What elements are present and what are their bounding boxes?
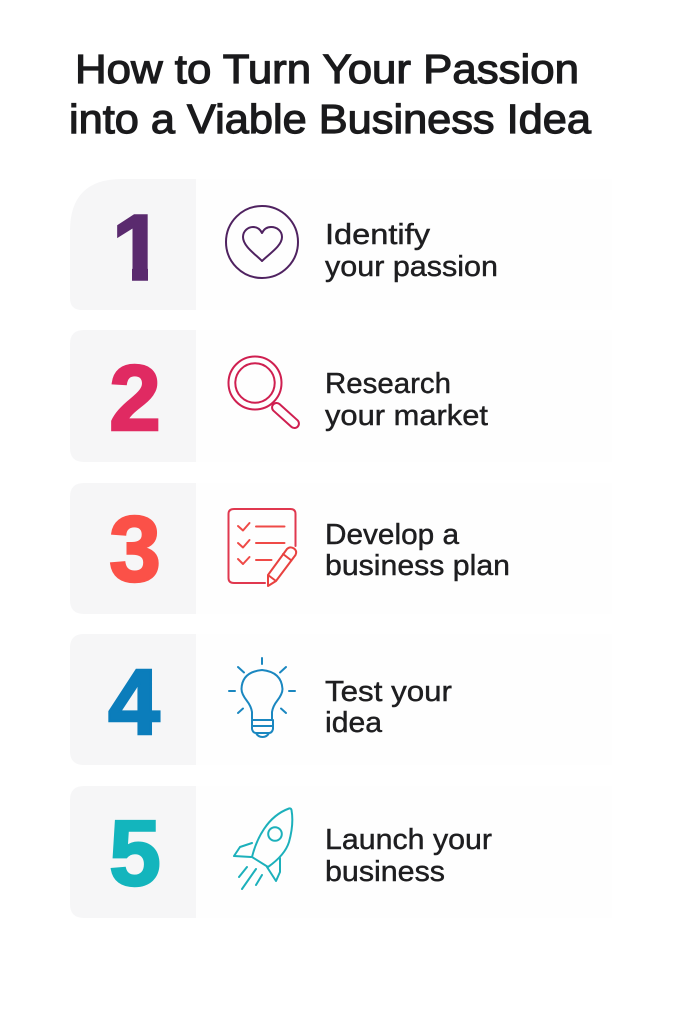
title: into a Viable Business Idea [69, 96, 591, 142]
number 1: 1 [112, 196, 164, 300]
label 3: Develop a [325, 519, 460, 551]
label 1: your passion [325, 251, 498, 283]
number 5: 5 [109, 801, 161, 905]
label 2: Research [325, 368, 451, 400]
title [69, 46, 591, 142]
label 3 [325, 519, 510, 582]
label 2: your market [325, 400, 488, 432]
label 3: business plan [325, 550, 510, 582]
number panel 3 [70, 483, 196, 614]
step 3: develop a business plan [70, 483, 612, 614]
icon: checklist and pencil [228, 509, 296, 586]
label 5 [325, 824, 492, 888]
number panel 4 [70, 634, 196, 765]
step 4: test your idea [70, 634, 612, 765]
number 4: 4 [108, 650, 160, 754]
label 1 [325, 219, 498, 283]
label 4 [325, 676, 452, 739]
label 1: Identify [325, 219, 431, 251]
label 2 [325, 368, 488, 432]
number panel 2 [70, 330, 196, 462]
icon: heart in circle [226, 206, 298, 278]
icon: rocket [234, 808, 292, 889]
label 5: business [325, 856, 445, 888]
label 5: Launch your [325, 824, 492, 856]
step 1: identify your passion [70, 179, 496, 310]
step 2: research your market [70, 330, 612, 462]
title: How to Turn Your Passion [75, 46, 579, 92]
icon: light bulb [229, 658, 295, 737]
label 4: idea [325, 707, 383, 739]
step 5: launch your business [70, 786, 612, 918]
number 3: 3 [109, 497, 161, 601]
number panel 1 [70, 179, 196, 310]
number panel 5 [70, 786, 196, 918]
icon: magnifying glass [228, 356, 301, 430]
label 4: Test your [325, 676, 452, 708]
number 2: 2 [109, 346, 161, 450]
